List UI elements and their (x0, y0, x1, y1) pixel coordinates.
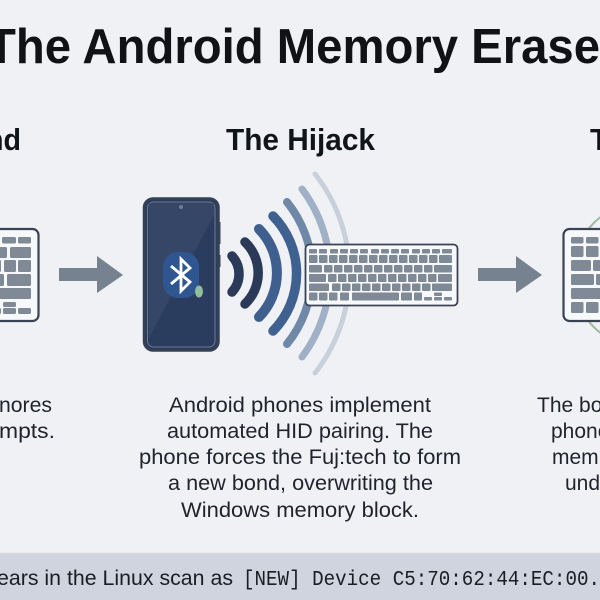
text: center description: automated HID pairing. The (167, 419, 433, 443)
icon: right keyboard (564, 229, 600, 321)
text: right description: und (565, 472, 600, 495)
footer text (0, 566, 600, 592)
arrow: left (59, 256, 123, 293)
text: center description: Windows memory block. (181, 498, 419, 522)
icon: signal waves (232, 174, 349, 373)
arrow: right (478, 256, 542, 293)
footer bar (0, 553, 600, 600)
text: center description: phone forces the Fuj:tech to form (139, 445, 461, 469)
icon: bluetooth badge (163, 252, 203, 298)
footer text: ears in the Linux scan as (0, 566, 233, 590)
icon: green ring (572, 202, 600, 348)
icon: left keyboard (0, 229, 38, 321)
text: right description: mem (552, 446, 599, 469)
text: center description: Android phones implement (169, 393, 431, 417)
text: center description (139, 393, 461, 522)
heading: the hijack: The Hijack (226, 122, 376, 157)
icon: center keyboard (306, 244, 458, 306)
icon: phone (144, 198, 220, 350)
text: right description (537, 394, 600, 495)
text: left description: mpts. (0, 419, 55, 443)
text: center description: a new bond, overwriting the (168, 471, 433, 495)
text: left description (0, 393, 55, 443)
text: left description: nores (0, 393, 52, 417)
